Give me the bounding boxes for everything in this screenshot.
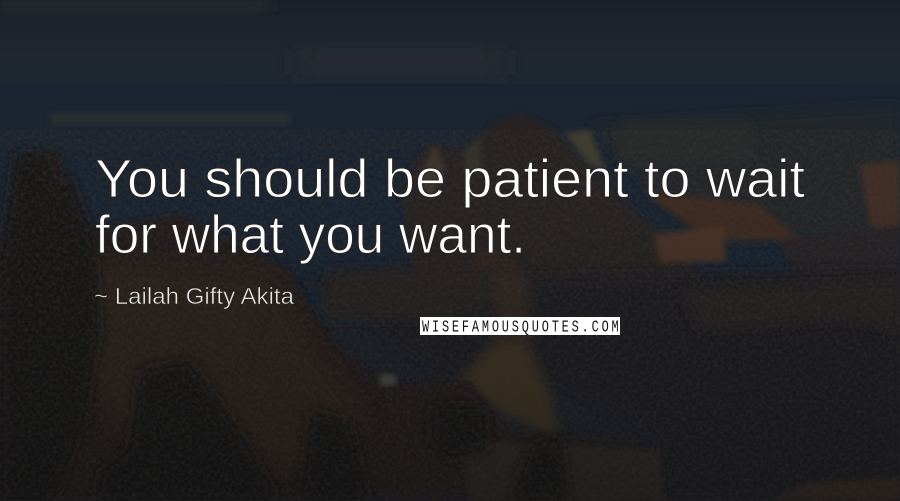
darkening veil bbox=[0, 200, 900, 501]
sky bbox=[0, 0, 900, 90]
dark trees bbox=[0, 153, 570, 501]
far canyon rim bbox=[0, 84, 900, 324]
quote text: You should be patient to wait bbox=[95, 149, 805, 209]
mid canyon shadow bbox=[300, 270, 900, 501]
central lit cliff bbox=[455, 335, 560, 440]
quote text: for what you want. bbox=[95, 205, 526, 265]
watermark: wisefamousquotes.com: WISEFAMOUSQUOTES.COM bbox=[422, 319, 619, 337]
author attribution: ~ Lailah Gifty Akita bbox=[94, 283, 294, 309]
foreground cliff bbox=[0, 150, 665, 501]
rock grain texture bbox=[0, 130, 900, 501]
quote text bbox=[95, 149, 805, 265]
central butte bbox=[400, 113, 900, 300]
